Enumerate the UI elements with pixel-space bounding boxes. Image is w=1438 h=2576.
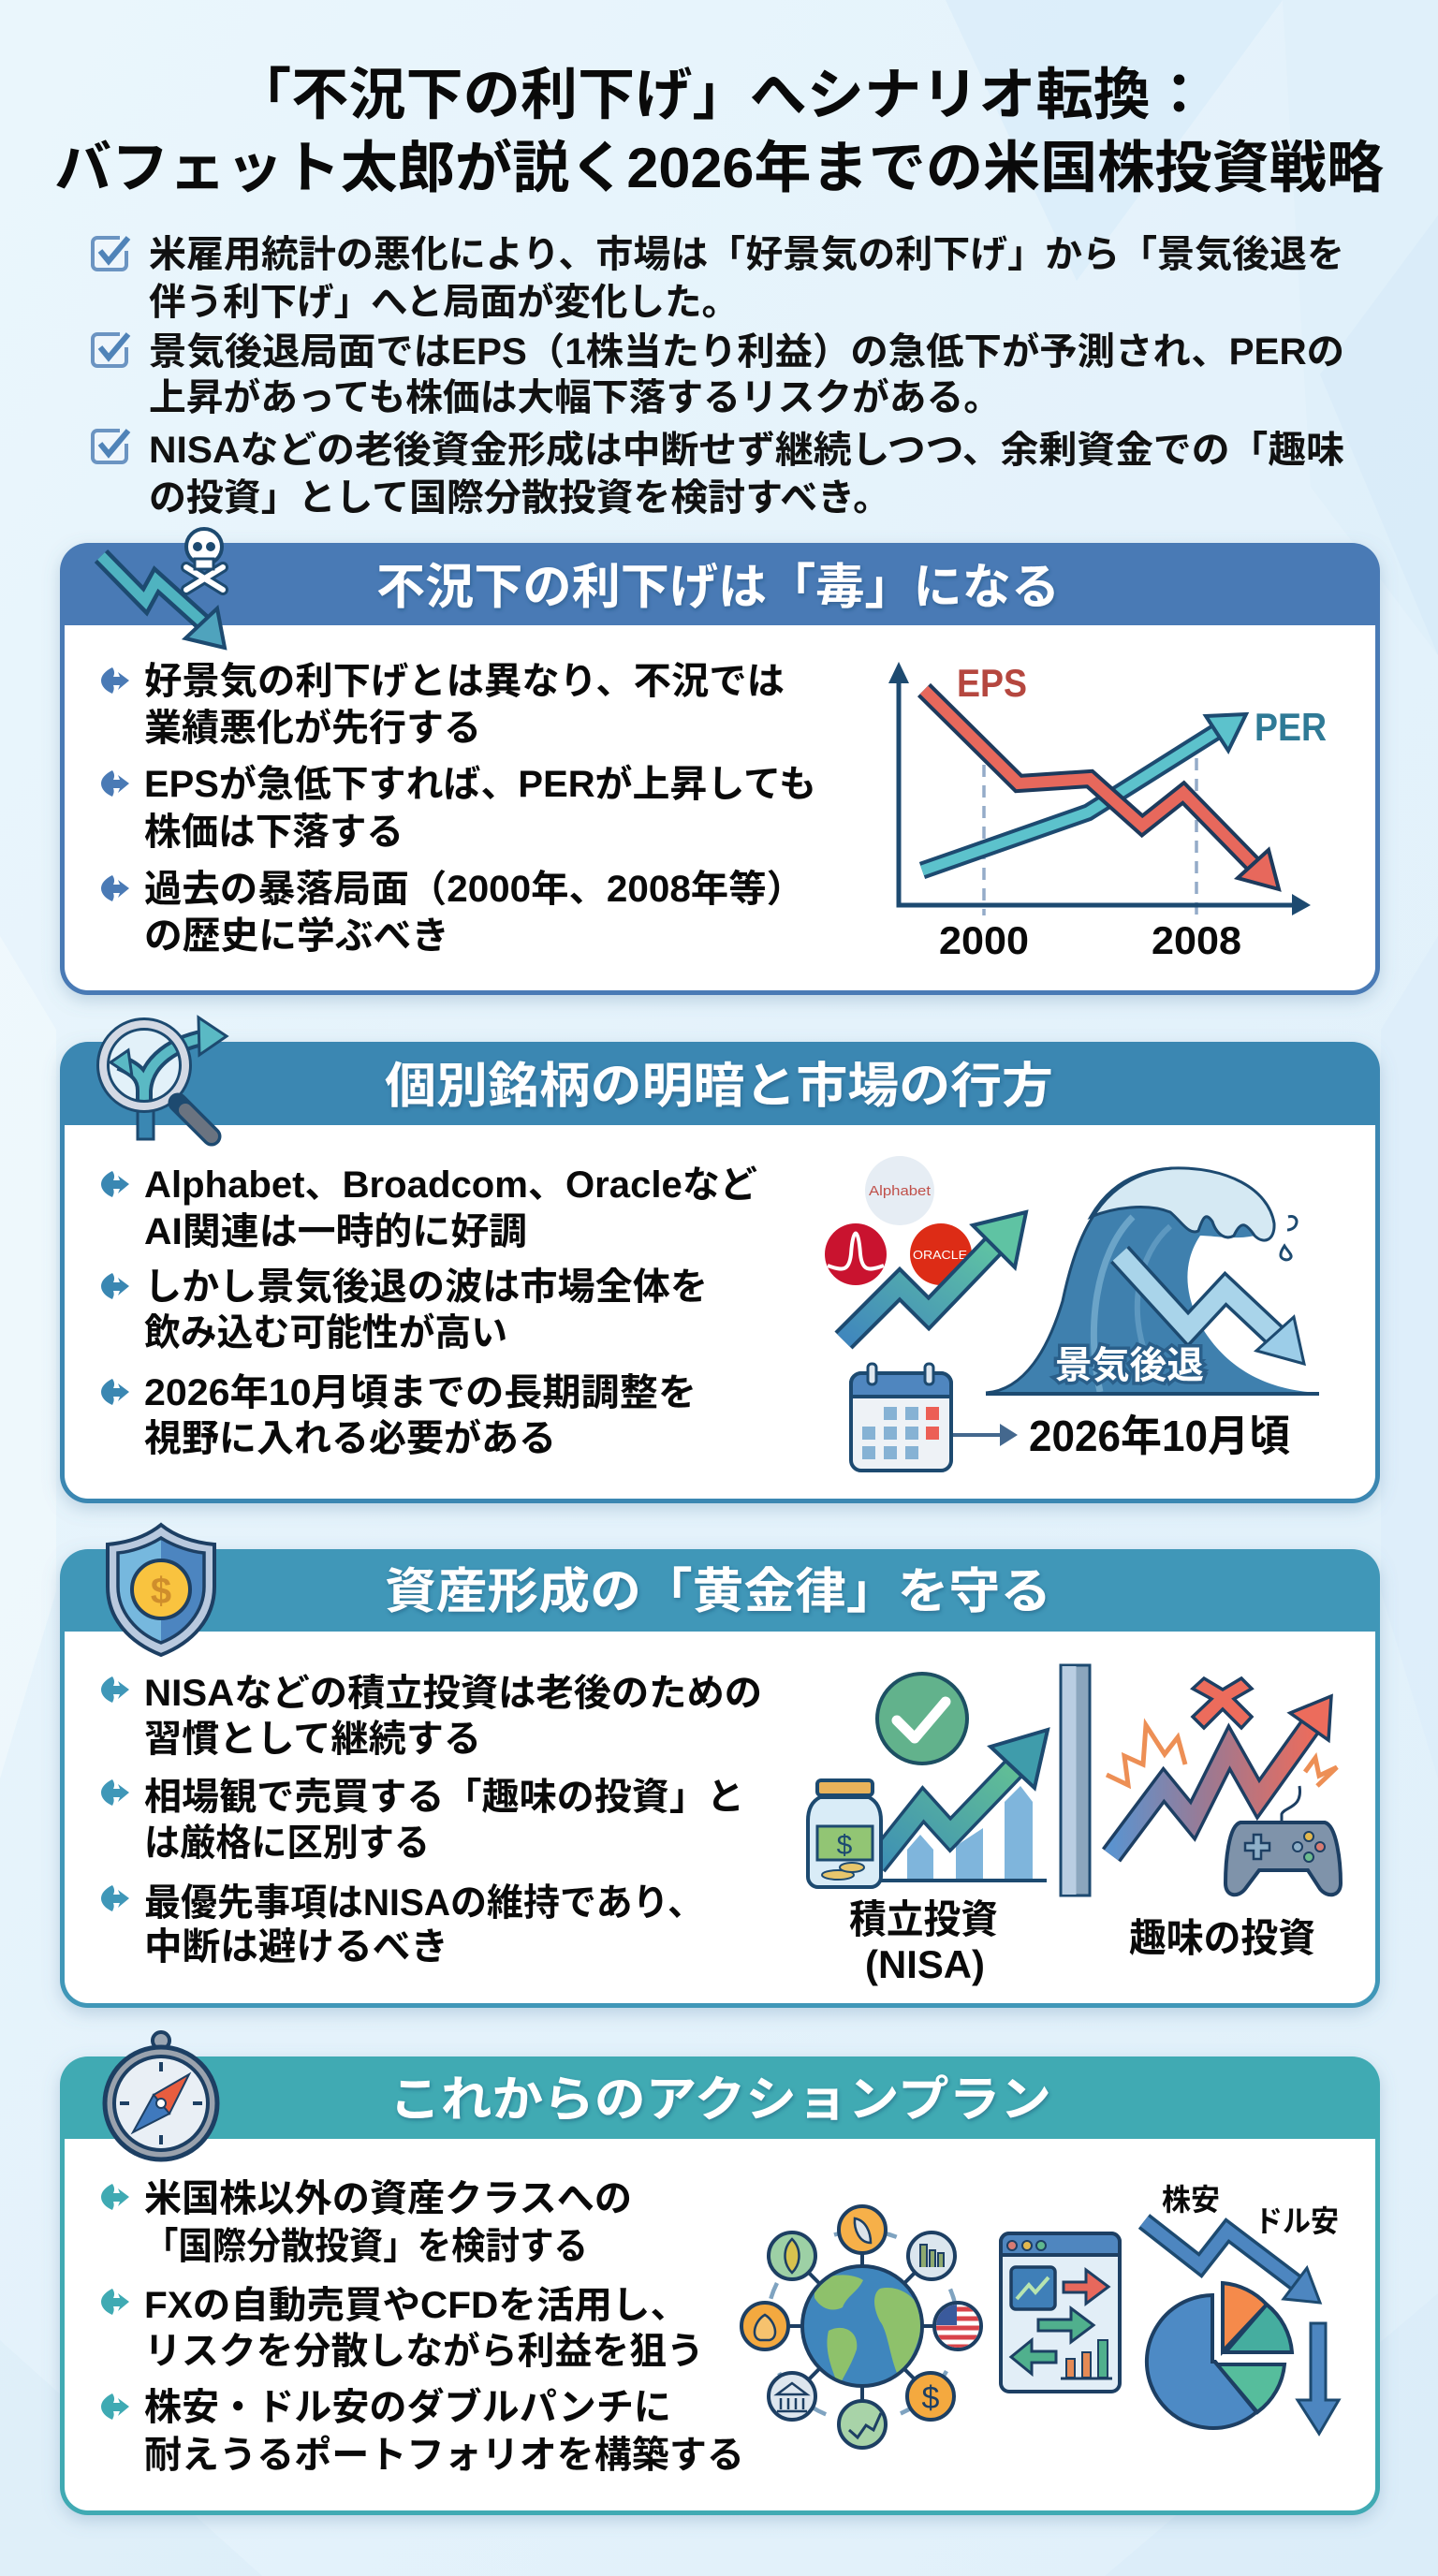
- summary item 3: の投資」として国際分散投資を検討すべき。: [149, 477, 890, 519]
- bullet list: 業績悪化が先行する: [144, 708, 481, 749]
- illustration: steady investment NISA: $: [837, 1830, 853, 1861]
- illustration: trading window: [1001, 2233, 1120, 2392]
- icon: shield with coin: [108, 1525, 214, 1655]
- bullet list: 飲み込む可能性が高い: [144, 1312, 507, 1354]
- summary item 2: 景気後退局面ではEPS（1株当たり利益）の急低下が予測され、PERの: [149, 331, 1344, 373]
- panel: stocks and market: [60, 1017, 1380, 1503]
- illustration: steady investment NISA: [808, 1665, 1090, 1986]
- bullet list: 耐えうるポートフォリオを構築する: [144, 2435, 744, 2476]
- bullet list: 中断は避けるべき: [144, 1926, 448, 1968]
- panel frame: [60, 2056, 1380, 2515]
- illustration: weak stocks and dollar: [1144, 2183, 1339, 2434]
- bullet list: 株価は下落する: [144, 812, 404, 853]
- bullet list: リスクを分散しながら利益を狙う: [144, 2331, 704, 2372]
- bullet list: AI関連は一時的に好調: [144, 1211, 527, 1252]
- chart: EPS and PER lines: EPS: [957, 661, 1027, 705]
- summary item 3: [93, 430, 1344, 519]
- heading: これからのアクションプラン: [389, 2073, 1051, 2128]
- bullet list: [101, 1164, 757, 1459]
- panel: action plan: [60, 2032, 1380, 2515]
- bullet list: 「国際分散投資」を検討する: [144, 2226, 588, 2267]
- heading: 不況下の利下げは「毒」になる: [376, 561, 1060, 615]
- chart: EPS and PER lines: [888, 661, 1327, 962]
- bullet list: 視野に入れる必要がある: [144, 1418, 556, 1459]
- panel: golden rule: [60, 1525, 1380, 2008]
- chart: EPS and PER lines: 2000: [939, 918, 1029, 962]
- bullet list: FXの自動売買やCFDを活用し、: [144, 2285, 688, 2326]
- summary item 1: 伴う利下げ」へと局面が変化した。: [149, 282, 739, 323]
- bullet list: [101, 661, 816, 957]
- illustration: steady investment NISA: 積立投資: [849, 1897, 998, 1941]
- summary list: [93, 234, 1344, 519]
- illustration: recession wave: 景気後退: [1055, 1345, 1204, 1386]
- bullet list: NISAなどの積立投資は老後のための: [144, 1673, 762, 1714]
- illustration: AI stocks rising: Alphabet: [869, 1183, 932, 1199]
- illustration: hobby investment: 趣味の投資: [1129, 1916, 1315, 1960]
- icon: magnifier with fork: [100, 1017, 227, 1139]
- panel frame: [60, 1549, 1380, 2008]
- bullet list: しかし景気後退の波は市場全体を: [144, 1266, 708, 1308]
- bullet list: 最優先事項はNISAの維持であり、: [144, 1882, 704, 1924]
- illustration: recession wave: [986, 1168, 1319, 1394]
- summary item 3: NISAなどの老後資金形成は中断せず継続しつつ、余剰資金での「趣味: [149, 430, 1344, 471]
- bullet list: EPSが急低下すれば、PERが上昇しても: [144, 764, 816, 805]
- bullet list: 習慣として継続する: [144, 1719, 481, 1760]
- illustration: globe diversification: [741, 2206, 981, 2448]
- bullet list: Alphabet、Broadcom、Oracleなど: [144, 1164, 757, 1206]
- illustration: weak stocks and dollar: 株安: [1162, 2183, 1220, 2217]
- icon: shield with coin: $: [151, 1571, 171, 1612]
- summary item 2: [93, 331, 1344, 418]
- illustration: globe diversification: $: [922, 2380, 940, 2416]
- summary item 1: 米雇用統計の悪化により、市場は「好景気の利下げ」から「景気後退を: [149, 234, 1344, 275]
- illustration: AI stocks rising: [825, 1156, 1026, 1340]
- illustration: AI stocks rising: ORACLE: [913, 1248, 967, 1262]
- bullet list: 米国株以外の資産クラスへの: [144, 2178, 632, 2219]
- chart: EPS and PER lines: PER: [1255, 705, 1327, 749]
- summary item 2: 上昇があっても株価は大幅下落するリスクがある。: [149, 377, 1001, 418]
- heading: 個別銘柄の明暗と市場の行方: [385, 1060, 1053, 1114]
- bullet list: [101, 2178, 744, 2476]
- illustration: hobby investment: [1107, 1678, 1341, 1960]
- title: [54, 64, 1384, 199]
- illustration: steady investment NISA: (NISA): [865, 1942, 985, 1986]
- bullet list: 好景気の利下げとは異なり、不況では: [144, 661, 785, 702]
- bullet list: 2026年10月頃までの長期調整を: [144, 1372, 697, 1413]
- illustration: calendar to October 2026: 2026年10月頃: [1029, 1412, 1290, 1460]
- icon: falling arrow and skull: [101, 529, 225, 648]
- bullet list: は厳格に区別する: [144, 1822, 430, 1864]
- summary item 1: [93, 234, 1344, 323]
- title: 「不況下の利下げ」へシナリオ転換：: [234, 64, 1208, 126]
- icon: compass: [105, 2032, 217, 2159]
- bullet list: 過去の暴落局面（2000年、2008年等）: [144, 869, 804, 910]
- illustration: weak stocks and dollar: ドル安: [1255, 2204, 1339, 2238]
- bullet list: 相場観で売買する「趣味の投資」と: [144, 1777, 744, 1818]
- illustration: calendar to October 2026: [851, 1364, 1290, 1471]
- bullet list: 株安・ドル安のダブルパンチに: [144, 2387, 671, 2428]
- bullet list: の歴史に学ぶべき: [144, 915, 449, 957]
- title: バフェット太郎が説く2026年までの米国株投資戦略: [54, 137, 1384, 199]
- chart: EPS and PER lines: 2008: [1152, 918, 1241, 962]
- panel frame: [60, 543, 1380, 995]
- panel frame: [60, 1042, 1380, 1503]
- panel: poison rate cut: [60, 529, 1380, 995]
- heading: 資産形成の「黄金律」を守る: [385, 1565, 1051, 1619]
- bullet list: [101, 1673, 762, 1968]
